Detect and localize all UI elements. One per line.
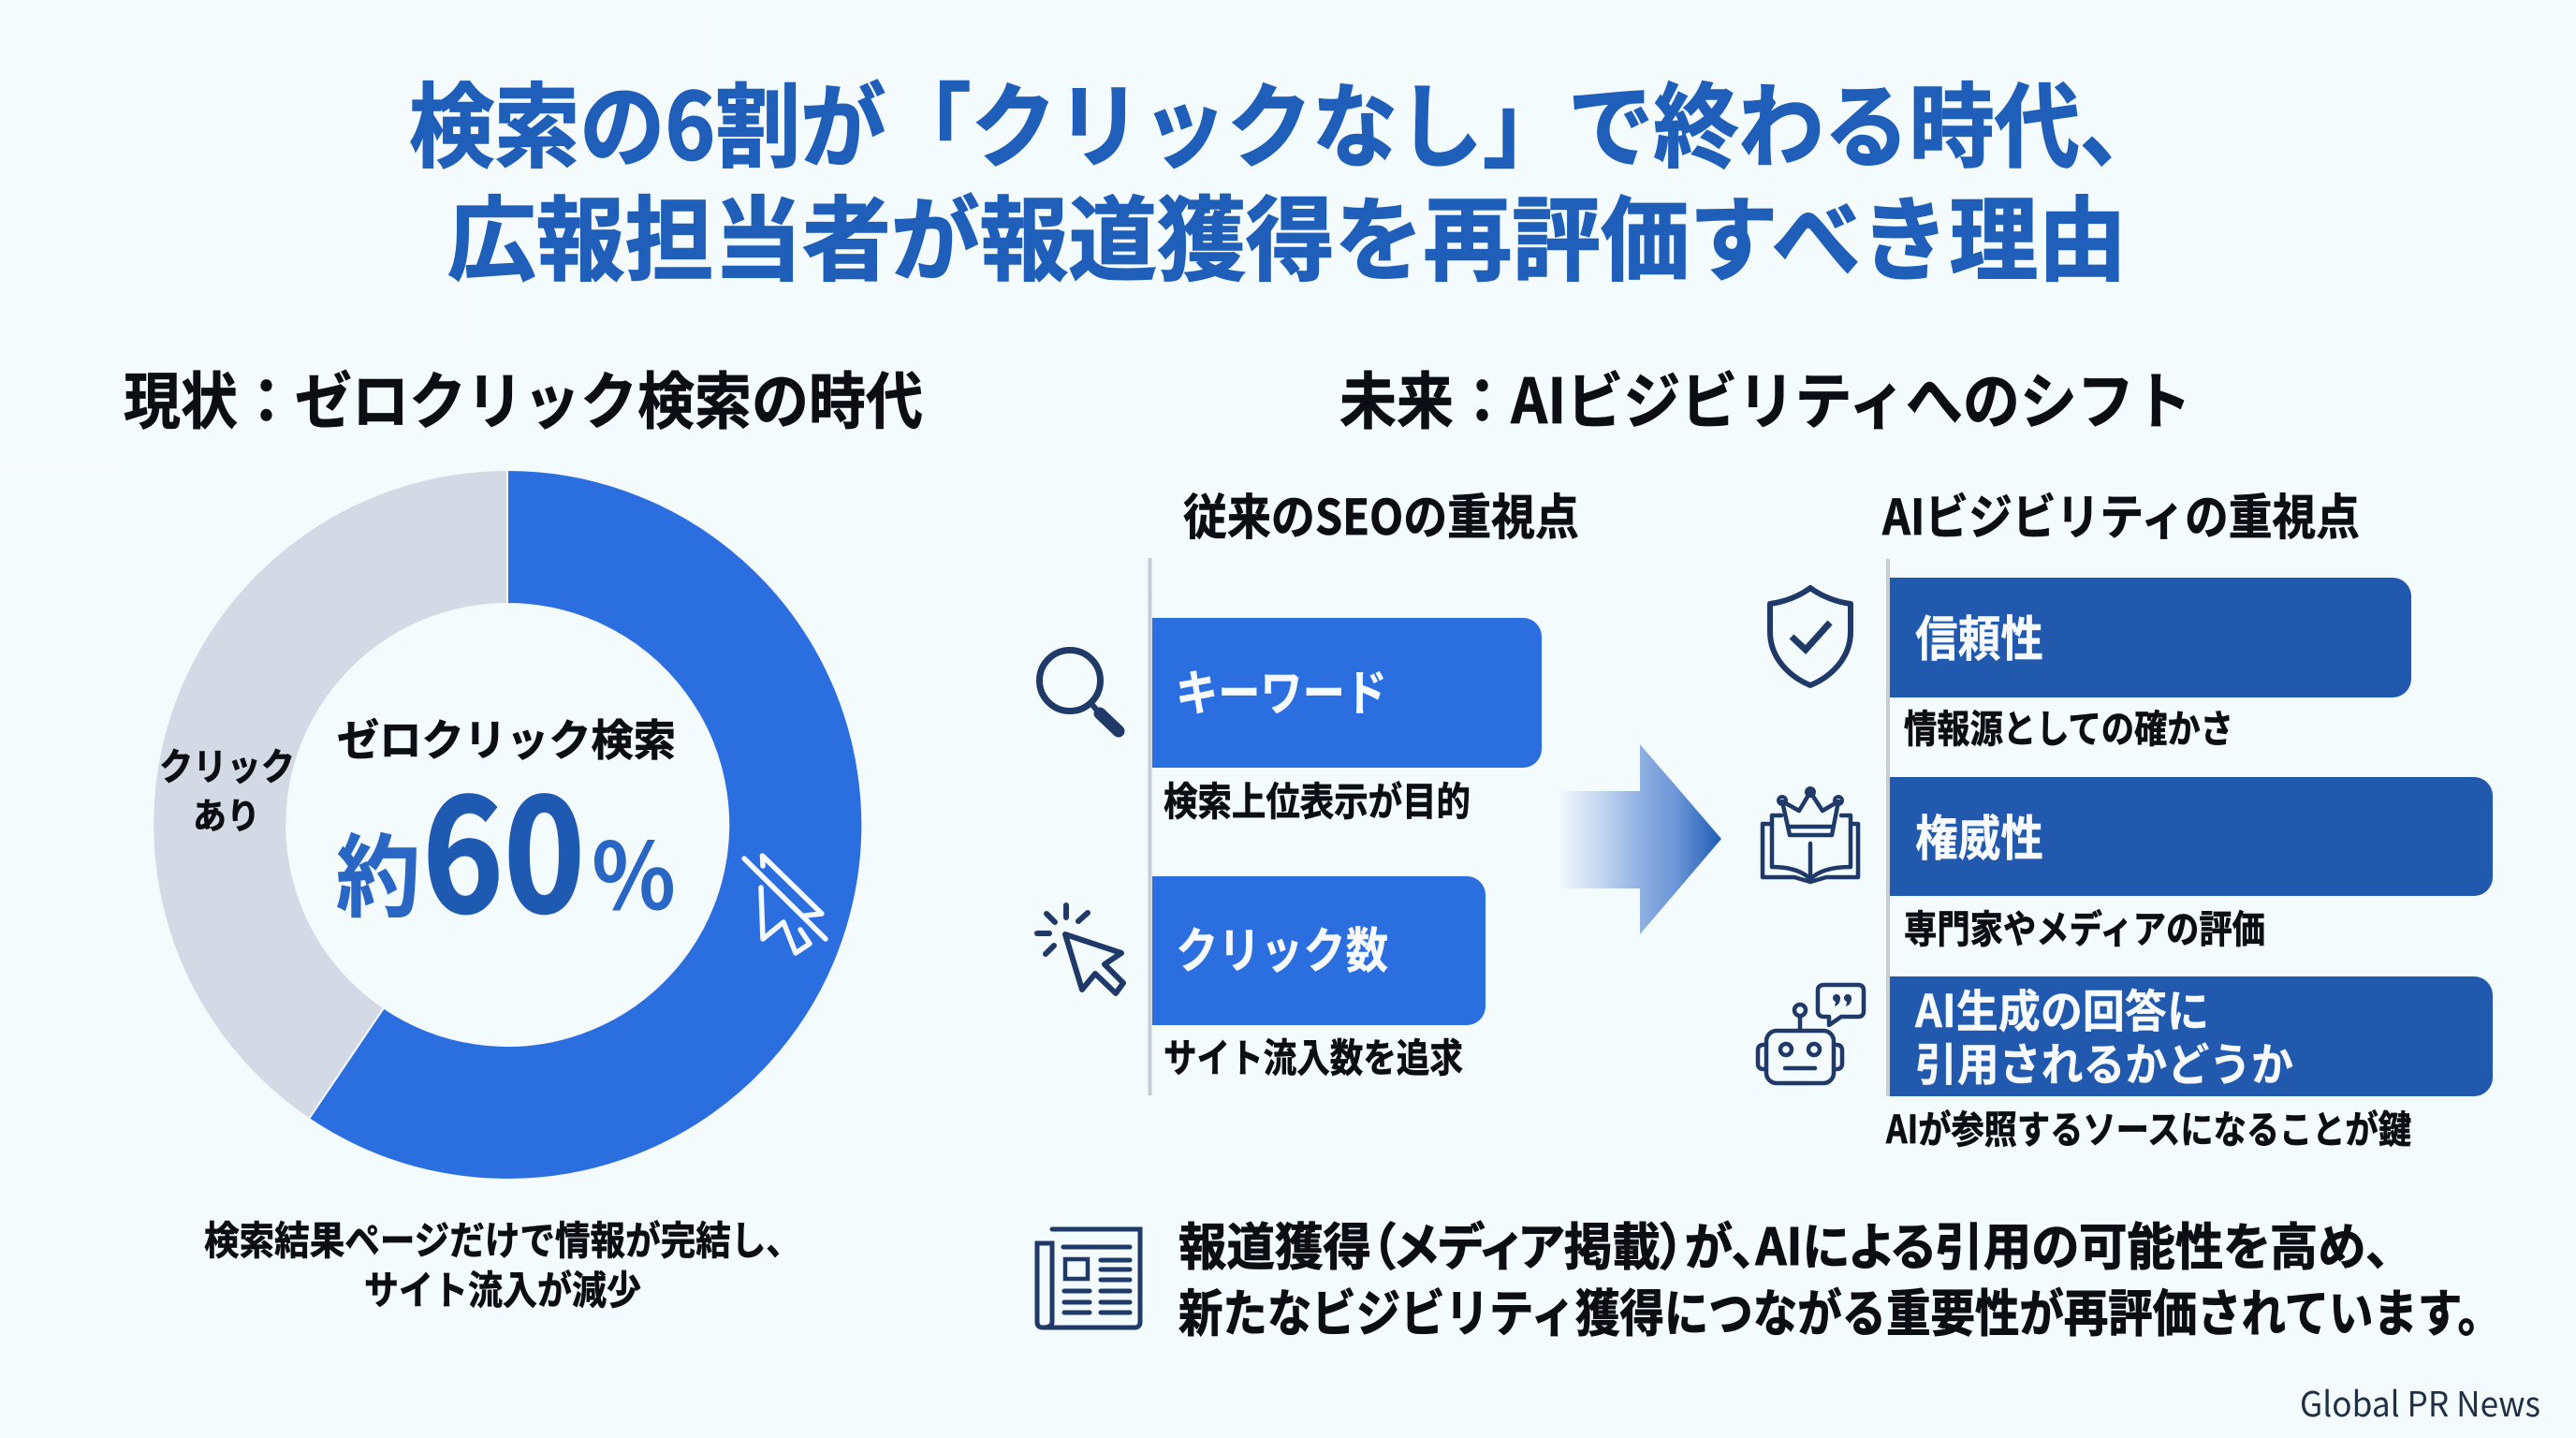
description: trust: 情報源としての確かさ: [1904, 697, 2233, 754]
bar: AI citation: 引用されるかどうか: [1915, 1028, 2293, 1093]
callout: media coverage: [1037, 1206, 2502, 1346]
caption: サイト流入が減少: [364, 1259, 641, 1316]
arrow: [1560, 744, 1721, 934]
description: AI citation: AIが参照するソースになることが鍵: [1885, 1098, 2411, 1154]
label: with click: クリック: [159, 737, 295, 791]
icon: robot with speech bubble: [1758, 985, 1864, 1083]
center value: [336, 731, 676, 958]
bar: authority: [1890, 777, 2493, 896]
label: with click: [159, 737, 295, 839]
bar: keyword: [1152, 618, 1542, 768]
subheading: AI visibility: AIビジビリティの重視点: [1881, 478, 2360, 549]
caption: 検索結果ページだけで情報が完結し、: [204, 1210, 801, 1267]
subheading: traditional SEO: 従来のSEOの重視点: [1183, 478, 1579, 549]
icon: crossed-out cursor: [744, 856, 826, 953]
column: traditional SEO: [1037, 478, 1579, 1095]
bar: authority: 権威性: [1915, 800, 2043, 870]
icon: shield: [1770, 588, 1851, 685]
center value: 約: [336, 805, 420, 935]
bar: click count: [1152, 876, 1486, 1025]
caption: [204, 1210, 801, 1316]
bar: AI citation: [1890, 975, 2493, 1096]
panel: current state: [124, 352, 923, 1316]
label: with click: あり: [193, 787, 260, 839]
bar: trust: [1890, 578, 2411, 697]
title: 広報担当者が報道獲得を再評価すべき理由: [447, 167, 2127, 300]
heading: current state: 現状：ゼロクリック検索の時代: [124, 352, 923, 442]
heading: future: 未来：AIビジビリティへのシフト: [1339, 352, 2191, 442]
center value: %: [592, 803, 676, 936]
segment: zero click 60%: [309, 470, 862, 1180]
callout text: 報道獲得（メディア掲載）が、AIによる引用の可能性を高め、: [1178, 1206, 2390, 1280]
description: click count: サイト流入数を追求: [1164, 1027, 1463, 1084]
icon: magnifier: [1039, 650, 1119, 731]
bar: click count: クリック数: [1176, 912, 1388, 982]
icon: crown and book: [1763, 788, 1858, 882]
callout text: [1178, 1206, 2502, 1346]
donut chart: [153, 470, 862, 1180]
bar: AI citation: AI生成の回答に: [1914, 975, 2209, 1040]
segment: with click 40%: [153, 470, 507, 1119]
bar: trust: 信頼性: [1915, 600, 2043, 670]
panel: future: [1037, 352, 2493, 1154]
source credit: Global PR News: [2300, 1376, 2540, 1427]
icon: newspaper: [1037, 1229, 1140, 1328]
bar: keyword: キーワード: [1176, 654, 1387, 725]
column: AI visibility: [1758, 478, 2493, 1154]
title: [409, 53, 2165, 300]
center label: ゼロクリック検索: [337, 707, 676, 769]
center value: 60: [422, 731, 585, 958]
description: keyword: 検索上位表示が目的: [1164, 770, 1471, 828]
description: authority: 専門家やメディアの評価: [1904, 898, 2265, 954]
title: 検索の6割が「クリックなし」で終わる時代、: [409, 53, 2165, 186]
icon: click cursor: [1037, 905, 1123, 993]
